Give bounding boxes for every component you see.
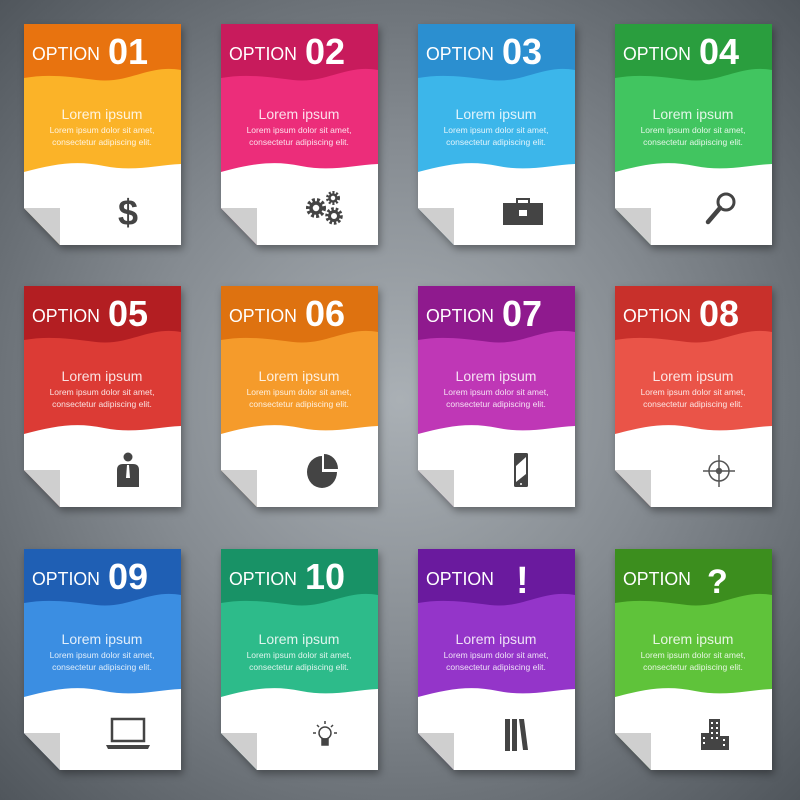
card: option 06: 06 xyxy=(305,293,345,334)
card: option exclamation: Lorem ipsum xyxy=(456,631,536,647)
card: option 09: Lorem ipsum dolor sit amet, xyxy=(50,650,154,660)
card: option 05: Lorem ipsum xyxy=(62,368,142,384)
card: option 02 xyxy=(219,24,384,253)
card: option question xyxy=(613,549,778,777)
card: option 04: Lorem ipsum xyxy=(653,106,733,122)
card: option 03: Lorem ipsum xyxy=(456,106,536,122)
card: option 05: consectetur adipiscing elit. xyxy=(52,399,152,409)
card: option 10: 10 xyxy=(305,556,345,597)
card: option 02: Lorem ipsum xyxy=(259,106,339,122)
card: option 02: consectetur adipiscing elit. xyxy=(249,137,349,147)
card: option 05: 05 xyxy=(108,293,148,334)
card: option 04: OPTION xyxy=(623,44,691,64)
card: option 10: Lorem ipsum xyxy=(259,631,339,647)
card: option 01: Lorem ipsum dolor sit amet, xyxy=(50,125,154,135)
card: option 06: OPTION xyxy=(229,306,297,326)
card: option 10: consectetur adipiscing elit. xyxy=(249,662,349,672)
icon: pie chart xyxy=(307,454,338,488)
card: option question: ? xyxy=(707,563,728,601)
card: option question: consectetur adipiscing elit. xyxy=(643,662,743,672)
icon: smartphone xyxy=(514,453,528,487)
card: option 10 xyxy=(219,549,384,778)
card: option 09 xyxy=(22,549,187,778)
card: option 08: 08 xyxy=(699,293,739,334)
card: option 02: OPTION xyxy=(229,44,297,64)
card: option 09: OPTION xyxy=(32,569,100,589)
card: option 03: 03 xyxy=(502,31,542,72)
card: option 08: Lorem ipsum dolor sit amet, xyxy=(641,387,745,397)
card: option 06: Lorem ipsum xyxy=(259,368,339,384)
card: option 01 xyxy=(22,24,187,253)
card: option 01: OPTION xyxy=(32,44,100,64)
card: option 06 xyxy=(219,286,384,515)
card: option 03 xyxy=(416,24,581,253)
icon: briefcase xyxy=(503,199,543,225)
card: option 07: Lorem ipsum dolor sit amet, xyxy=(444,387,548,397)
icon: binders xyxy=(505,719,528,751)
icon: target xyxy=(703,455,735,487)
card: option question: Lorem ipsum xyxy=(653,631,733,647)
card: option question: OPTION xyxy=(623,569,691,589)
card: option exclamation xyxy=(416,549,581,778)
card: option 07: consectetur adipiscing elit. xyxy=(446,399,546,409)
card: option 06: Lorem ipsum dolor sit amet, xyxy=(247,387,351,397)
card: option 08: Lorem ipsum xyxy=(653,368,733,384)
card: option 03: Lorem ipsum dolor sit amet, xyxy=(444,125,548,135)
card: option 02: 02 xyxy=(305,31,345,72)
card: option 04: 04 xyxy=(699,31,739,72)
card: option 03: consectetur adipiscing elit. xyxy=(446,137,546,147)
card: option 10: OPTION xyxy=(229,569,297,589)
card: option 07: Lorem ipsum xyxy=(456,368,536,384)
card: option 09: Lorem ipsum xyxy=(62,631,142,647)
card: option 02: Lorem ipsum dolor sit amet, xyxy=(247,125,351,135)
card: option 03: OPTION xyxy=(426,44,494,64)
card: option 04: consectetur adipiscing elit. xyxy=(643,137,743,147)
card: option 01: Lorem ipsum xyxy=(62,106,142,122)
card: option 07: 07 xyxy=(502,293,542,334)
card: option 08: OPTION xyxy=(623,306,691,326)
icon: businessman xyxy=(117,452,139,487)
icon: gears xyxy=(308,192,341,223)
card: option exclamation: OPTION xyxy=(426,569,494,589)
card: option 10: Lorem ipsum dolor sit amet, xyxy=(247,650,351,660)
card: option 05: OPTION xyxy=(32,306,100,326)
card: option 07: OPTION xyxy=(426,306,494,326)
card: option exclamation: consectetur adipiscing elit. xyxy=(446,662,546,672)
card: option 04: Lorem ipsum dolor sit amet, xyxy=(641,125,745,135)
icon: laptop xyxy=(106,719,150,749)
card: option 08: consectetur adipiscing elit. xyxy=(643,399,743,409)
icon: dollar: $ xyxy=(118,192,138,233)
card: option question: Lorem ipsum dolor sit amet, xyxy=(641,650,745,660)
card: option 07 xyxy=(416,286,581,515)
card: option 06: consectetur adipiscing elit. xyxy=(249,399,349,409)
card: option 04 xyxy=(613,24,778,253)
card: option exclamation: Lorem ipsum dolor sit amet, xyxy=(444,650,548,660)
icon: light bulb xyxy=(313,721,337,745)
card: option 08 xyxy=(613,286,778,515)
icon: magnifier xyxy=(708,194,734,222)
card: option 05: Lorem ipsum dolor sit amet, xyxy=(50,387,154,397)
card: option 09: 09 xyxy=(108,556,148,597)
card: option 05 xyxy=(22,286,187,515)
card: option 01: 01 xyxy=(108,31,148,72)
card: option 09: consectetur adipiscing elit. xyxy=(52,662,152,672)
card: option 01: consectetur adipiscing elit. xyxy=(52,137,152,147)
card: option exclamation: ! xyxy=(516,560,529,602)
icon: buildings xyxy=(701,719,729,750)
